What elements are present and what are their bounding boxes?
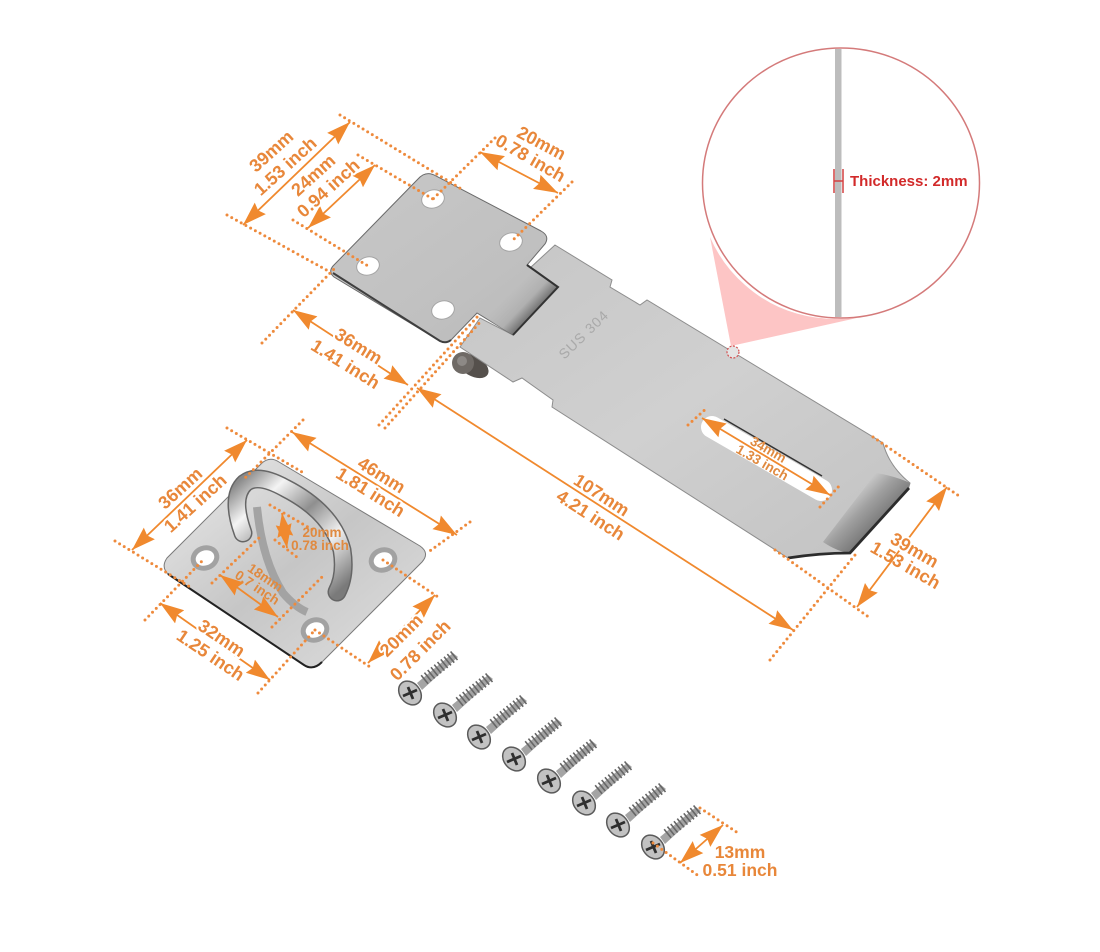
dim: eye hole spacing 32mm: 1.25 inch	[173, 625, 248, 685]
dim: hole spacing 24mm: 0.94 inch	[293, 155, 364, 221]
dim: leaf length 36mm: 1.41 inch	[308, 335, 383, 393]
dim: hole spacing 20mm	[433, 122, 572, 242]
dim: strap length 107mm: 4.21 inch	[553, 486, 628, 545]
leaf plate	[331, 174, 558, 342]
dim: staple height 20mm	[270, 505, 349, 558]
dim: staple span 18mm: 18mm	[245, 560, 286, 595]
dim: hole spacing 24mm	[287, 150, 433, 266]
magnifier circle	[702, 48, 980, 318]
dim: eye plate width 36mm	[115, 428, 302, 587]
dim: strap length 107mm	[385, 320, 855, 660]
dim: leaf length 36mm: 36mm	[331, 324, 386, 368]
dim: staple height 20mm: 0.78 inch	[291, 538, 349, 553]
slot	[712, 419, 822, 490]
dim: eye hole spacing 20mm: 20mm	[376, 610, 427, 661]
dim: screw length 13mm	[653, 808, 777, 880]
base plate	[164, 459, 426, 667]
thickness marker	[834, 169, 843, 193]
dim: eye hole spacing 32mm	[145, 558, 315, 693]
fold at tip	[823, 473, 910, 553]
pin	[452, 349, 493, 383]
dim: hasp width 39mm: 1.53 inch	[250, 133, 321, 199]
dim: eye plate length 46mm	[243, 420, 470, 553]
hasp	[331, 174, 910, 558]
dim: hole spacing 24mm: 24mm	[287, 150, 339, 200]
staple	[237, 479, 343, 592]
screws	[394, 653, 701, 863]
dim: screw length 13mm: 13mm	[715, 842, 765, 862]
sheet cross-section bar	[835, 49, 842, 317]
dim: eye plate width 36mm: 36mm	[154, 463, 206, 513]
dim: staple height 20mm: 20mm	[302, 525, 342, 540]
plate holes	[190, 544, 398, 644]
mounting holes	[355, 187, 524, 322]
dim: eye hole spacing 20mm	[315, 560, 455, 685]
dim: eye plate width 36mm: 1.41 inch	[160, 470, 231, 536]
dim: strap width 39mm: 39mm	[887, 528, 942, 572]
inner staple reflection	[257, 507, 307, 612]
dim: screw length 13mm: 0.51 inch	[703, 860, 777, 880]
magnifier callout: thickness	[702, 48, 980, 346]
dim: eye plate length 46mm: 46mm	[354, 453, 409, 497]
dim: eye plate length 46mm: 1.81 inch	[333, 463, 408, 521]
dim: leaf length 36mm	[262, 268, 478, 425]
sample marker	[727, 346, 739, 358]
dim: slot 34mm: 1.33 inch	[733, 442, 791, 484]
dim: staple span 18mm: 0.7 inch	[232, 567, 282, 608]
dim: strap width 39mm	[775, 437, 962, 618]
pink magnifier cone	[710, 237, 857, 346]
dim: staple span 18mm	[212, 535, 322, 627]
strap	[460, 245, 910, 558]
stamp: SUS 304	[555, 307, 612, 362]
eye plate	[164, 459, 426, 667]
dim: hole spacing 20mm: 0.78 inch	[492, 130, 569, 186]
dim: hasp width 39mm	[227, 115, 463, 272]
dim: strap length 107mm: 107mm	[570, 470, 633, 520]
dim: strap width 39mm: 1.53 inch	[867, 537, 944, 593]
thickness label: Thickness: 2mm	[850, 173, 968, 190]
dim: hasp width 39mm: 39mm	[245, 126, 297, 176]
dim: slot 34mm	[688, 407, 841, 507]
notch shadow	[513, 265, 558, 335]
dim: eye hole spacing 32mm: 32mm	[194, 615, 249, 661]
tip dark edge	[788, 488, 909, 558]
dim: slot 34mm: 34mm	[748, 433, 789, 466]
dim: eye hole spacing 20mm: 0.78 inch	[386, 616, 455, 685]
plate shadow edge	[333, 273, 451, 342]
bottom shadow edge	[168, 574, 322, 667]
dim: hole spacing 20mm: 20mm	[514, 122, 569, 164]
hinge bend	[477, 265, 558, 335]
